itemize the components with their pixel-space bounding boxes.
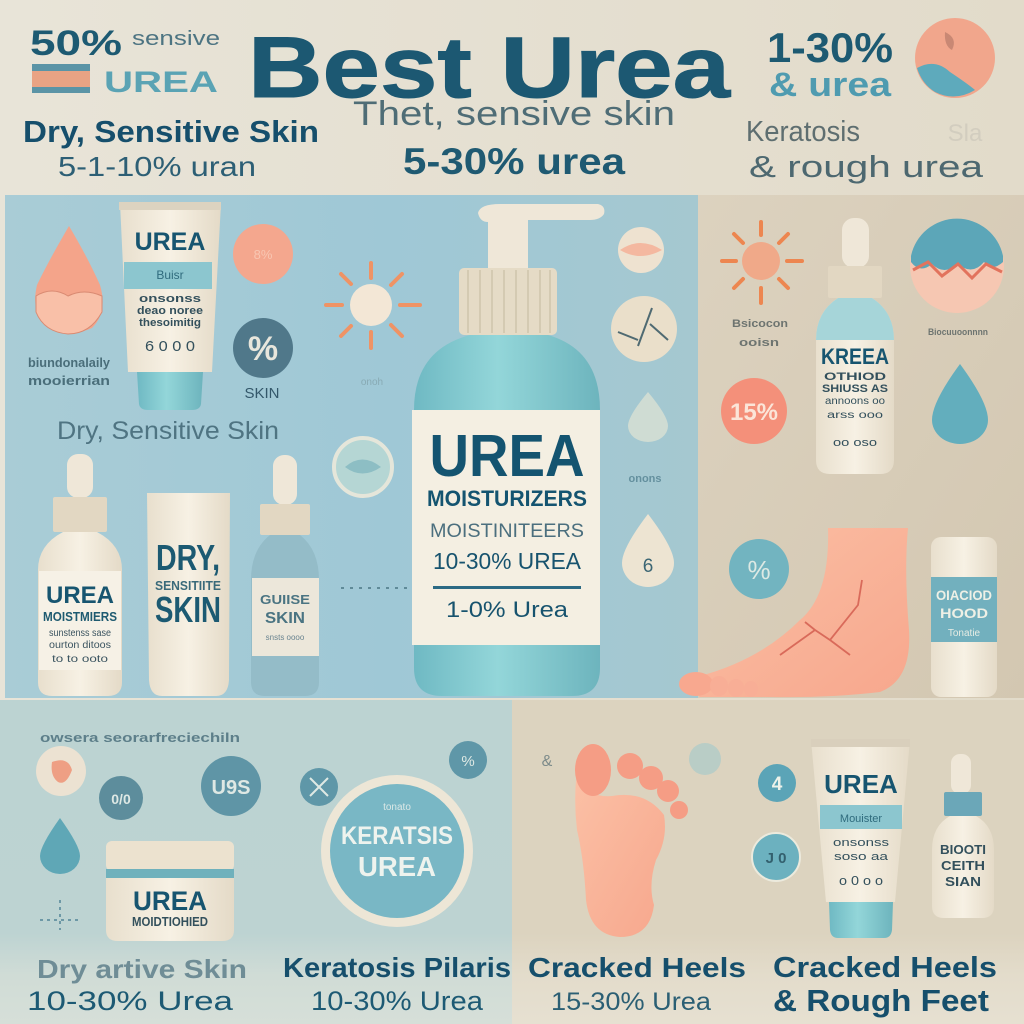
product: dropper bottle right: annoons oo [825,396,885,407]
text: faint caption right of bottle: onons [628,473,662,485]
product: urea tube top: Buisr [156,268,184,282]
heading: keratosis and rough: Sla [948,120,983,147]
icon: teal drop [40,818,80,874]
caption: cracked heels and rough feet: Cracked Heels [773,952,997,984]
product: urea tube top: deao noree [137,305,203,317]
product: dropper bottle left: ourton ditoos [49,640,111,651]
caption: cracked heels and rough feet [773,952,997,1018]
icon: percent circle [233,318,293,378]
product: teal dropper bottle: snsts oooo [266,633,305,642]
product: teal dropper bottle [251,455,319,696]
icon: percent circle: % [248,330,278,368]
caption: keratosis pilaris [283,952,511,1016]
product: small cream jar [931,537,997,697]
product: keratosis urea tin: UREA [358,851,436,882]
bottle label: 10-30% urea: 10-30% UREA [433,548,582,574]
text: sun caption [732,318,788,349]
product: dropper bottle left: UREA [46,582,114,609]
product: small cream jar: Tonatie [948,628,981,639]
icon: skin circle [915,18,995,98]
product: dropper bottle right: SHIUSS AS [822,383,888,395]
icon: dark disc 2 [201,756,261,816]
icon: teal water drop [932,364,988,444]
product: large urea pump bottle [412,204,604,696]
product: dry sensitive skin tube: SKIN [155,589,221,630]
product: dropper bottle left: MOISTMIERS [43,609,117,624]
icon: small connector marks [40,900,80,930]
product: teal dropper bottle: SKIN [265,610,305,627]
icon: number 4 disc: 4 [772,774,783,795]
product: urea jar: UREA [133,886,207,916]
bottle label: 1-0% urea: 1-0% Urea [446,597,569,622]
product: dropper bottle left [38,454,122,696]
caption: dry sensitive skin [27,954,247,1016]
product: keratosis urea tin [321,775,473,927]
bottle label: urea: UREA [430,423,584,489]
product: dropper bottle right: KREEA [821,344,889,369]
text: sun caption: ooisn [739,337,779,349]
caption: cracked heels [528,952,746,1016]
product: dropper bottle bottom: CEITH [941,858,985,873]
icon: faint disc [689,743,721,775]
caption: dry sensitive skin: 10-30% Urea [27,986,234,1016]
main title: Best Urea [248,20,731,116]
product: urea tube bottom [811,739,910,938]
product: urea tube top [119,202,221,410]
caption: keratosis pilaris: 10-30% Urea [311,986,484,1016]
icon: number 30 disc: J 0 [766,850,786,867]
text: blurred caption left: biundonalaily [28,355,111,370]
product: small cream jar: HOOD [940,605,988,621]
icon: disc with cross [300,768,338,806]
bottle label: moisturizers: MOISTURIZERS [427,486,587,511]
header: top left badge: 50% [30,24,122,63]
text: sun caption: Bsicocon [732,318,788,330]
product: urea tube bottom: UREA [824,769,898,799]
icon: skin layers circle [910,219,1004,313]
product: dropper bottle right: oo oso [833,437,877,449]
heading: keratosis and rough [746,116,984,184]
icon: 15% badge: 15% [730,399,778,426]
heading: dry sensitive skin: 5-1-10% uran [58,151,256,182]
icon: peach leaf disc [36,746,86,796]
text: skin layers caption: Biocuuoonnnn [928,327,988,337]
icon: number 30 disc [752,833,800,881]
icon: sun right [722,222,802,303]
heading: dry sensitive skin [23,114,319,182]
text: faint caption: onoh [361,377,383,388]
bottle label: blurred line: MOISTINITEERS [430,521,584,542]
illustration: cracked foot [679,528,909,697]
header: top left badge: sensive [132,28,220,50]
icon: salmon drop with skin [35,226,103,334]
heading: keratosis and rough: Keratosis [746,116,860,148]
product: urea tube top: thesoimitig [139,317,201,329]
product: dropper bottle left: to to ooto [52,654,109,665]
caption: cracked heels and rough feet: & Rough Feet [773,983,989,1018]
icon: percent teal disc: % [747,555,771,585]
product: teal dropper bottle: GUIISE [260,592,310,607]
icon: dark disc 2: U9S [212,777,250,799]
caption: keratosis pilaris: Keratosis Pilaris [283,952,511,983]
product: urea tube bottom: o 0 o o [839,873,883,888]
panel: blue main panel [5,195,698,698]
product: dropper bottle right: arss ooo [827,410,884,421]
icon: dark disc 1: 0/0 [111,791,131,807]
product: dropper bottle right: OTHIOD [824,371,886,383]
product: urea tube top: onsonss [139,293,201,305]
product: urea tube bottom: Mouister [840,813,882,825]
product: urea tube top: 6 0 0 0 [145,338,195,355]
subtitle: Thet, sensive skin [353,95,675,133]
product: dropper bottle bottom: BIOOTI [940,842,986,857]
heading: keratosis and rough: & rough urea [749,149,984,184]
product: urea tube bottom: soso aa [834,851,889,863]
product: dropper bottle left: sunstenss sase [49,628,111,639]
heading: dry sensitive skin: Dry, Sensitive Skin [23,114,319,149]
product: dry sensitive skin tube: DRY, [156,537,220,578]
product: small cream jar: OIACIOD [936,587,992,603]
icon: cracked skin disc [611,296,677,362]
icon: sun [326,263,420,348]
icon: water drop [628,392,668,442]
text: blurred caption left [28,355,111,388]
product: keratosis urea tin: tonato [383,802,411,813]
icon: peach circle [233,224,293,284]
subtitle percentage: 5-30% urea [403,141,625,182]
header: top right percentage: & urea [769,66,892,104]
icon: cream drop with digit [622,514,674,587]
text: blurred caption left: mooierrian [28,373,110,388]
icon: disc percent: % [461,753,475,770]
icon: dark disc 1 [99,776,143,820]
icon: percent teal disc [729,539,789,599]
product: keratosis urea tin: KERATSIS [341,822,453,850]
decorative label: dashed connector dots [341,587,412,589]
panel: bottom left [0,700,512,1024]
product: dry sensitive skin tube [147,493,230,696]
text: dry sensitive skin caption: Dry, Sensitive Skin [57,417,279,445]
icon: cream drop with digit: 6 [643,556,653,577]
illustration: foot sole [575,744,688,937]
product: dry sensitive skin tube: SENSITIITE [155,578,221,593]
caption: dry sensitive skin: Dry artive Skin [37,954,247,984]
icon: number 4 disc [758,764,796,802]
header: top left badge: UREA [104,66,218,99]
label: skin: SKIN [244,385,280,402]
product: urea tube top: UREA [135,228,205,256]
icon: 15% badge [721,378,787,444]
text: bottom left heading: owsera seorarfreciechiln [40,730,240,745]
icon: faint small symbol: & [542,753,553,770]
caption: cracked heels: 15-30% Urea [551,988,711,1016]
panel: bottom right [512,700,1024,1024]
icon: disc percent [449,741,487,779]
header: top right percentage: 1-30% [767,24,893,71]
icon: peach circle: 8% [254,247,273,262]
product: urea jar [106,841,234,941]
panel: beige right panel [698,195,1024,698]
product: dropper bottle bottom: SIAN [945,874,981,889]
icon: small peach disc [618,227,664,273]
product: urea tube bottom: onsonss [833,837,890,849]
caption: cracked heels: Cracked Heels [528,952,746,983]
header: top left badge [30,24,220,99]
icon: glass circle [334,438,392,496]
product: dropper bottle bottom [932,754,994,918]
product: dropper bottle right [816,218,894,474]
product: urea jar: MOIDTIOHIED [132,914,208,929]
header: top right percentage [767,24,893,104]
